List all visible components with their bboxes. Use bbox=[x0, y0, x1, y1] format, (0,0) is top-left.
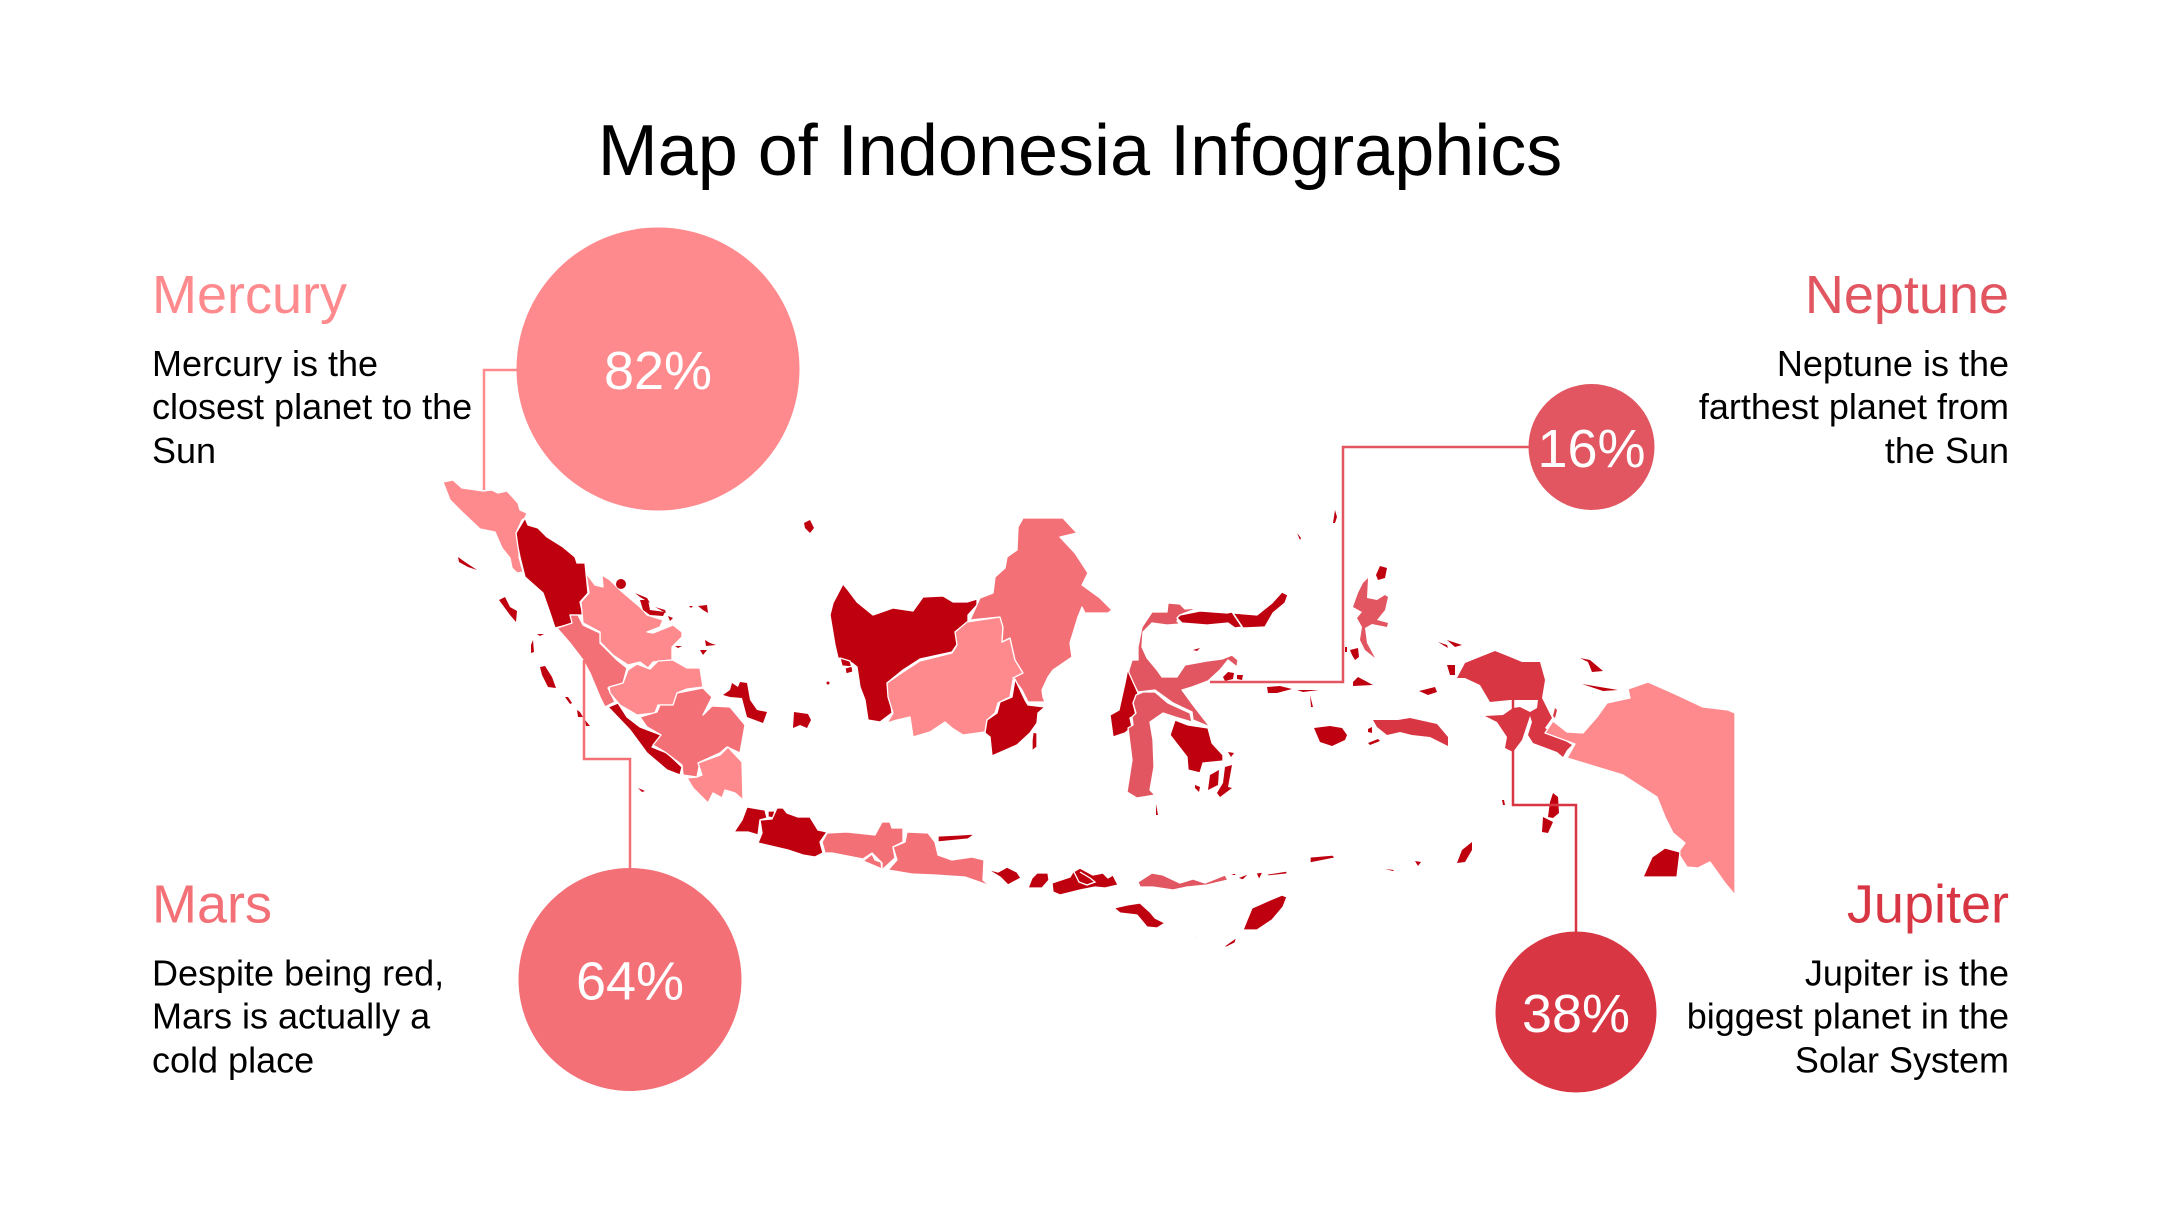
circle: 38%: 38% bbox=[1522, 984, 1630, 1044]
heading: Jupiter: Jupiter bbox=[1847, 874, 2009, 934]
text: Mars description: Despite being red, bbox=[152, 952, 444, 994]
circle: 38% bbox=[1496, 932, 1656, 1092]
text: Mercury description: closest planet to the bbox=[152, 386, 472, 427]
circle: 64%: 64% bbox=[576, 952, 684, 1012]
text: Jupiter description: Solar System bbox=[1795, 1040, 2009, 1080]
region: central and eastern islands bbox=[1156, 510, 1618, 871]
text: Jupiter description: Jupiter is the bbox=[1805, 952, 2009, 994]
heading: Mars: Mars bbox=[152, 874, 272, 934]
circle: 64% bbox=[518, 868, 742, 1091]
heading: Mercury: Mercury bbox=[152, 265, 347, 325]
region: Sumatra islands bbox=[458, 520, 830, 792]
circle: 82% bbox=[516, 228, 800, 510]
text: Mars description: cold place bbox=[152, 1040, 314, 1080]
connector: Jupiter bbox=[1513, 700, 1576, 940]
map of Indonesia bbox=[443, 480, 1735, 947]
circle: 16%: 16% bbox=[1537, 419, 1646, 479]
panel: Neptune bbox=[1528, 265, 2009, 510]
region: Java and Lesser Sunda bbox=[734, 807, 1335, 947]
text: Neptune description: farthest planet from bbox=[1699, 386, 2009, 427]
region: Kalimantan bbox=[830, 518, 1112, 756]
title: Map of Indonesia Infographics bbox=[598, 111, 1562, 191]
connector: Mercury bbox=[484, 370, 520, 490]
text: Mercury description: Mercury is the bbox=[152, 343, 378, 384]
region: Sumatra bbox=[443, 480, 745, 803]
connector: Neptune bbox=[1210, 447, 1535, 682]
panel: Jupiter bbox=[1496, 874, 2009, 1092]
heading: Neptune: Neptune bbox=[1805, 265, 2009, 325]
circle: 82%: 82% bbox=[604, 341, 712, 401]
text: Jupiter description: biggest planet in the bbox=[1687, 996, 2009, 1036]
panel: Mars bbox=[152, 868, 742, 1091]
connector: Mars bbox=[584, 660, 630, 875]
text: Neptune description: Neptune is the bbox=[1777, 343, 2009, 384]
region: Papua bbox=[1457, 651, 1735, 895]
text: Mercury description: Sun bbox=[152, 430, 216, 471]
text: Neptune description: the Sun bbox=[1885, 430, 2009, 471]
text: Mars description: Mars is actually a bbox=[152, 996, 431, 1036]
circle: 16% bbox=[1528, 384, 1654, 510]
region: Sulawesi bbox=[1110, 592, 1288, 798]
panel: Mercury bbox=[152, 228, 800, 510]
